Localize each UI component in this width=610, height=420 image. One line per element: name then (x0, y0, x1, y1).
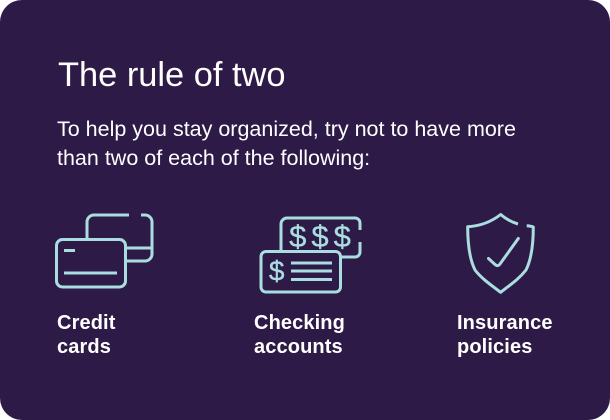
icon: shield with check mark (468, 214, 533, 292)
icon: checks with dollar signs: $ (334, 219, 351, 254)
label: credit cards: cards (57, 336, 111, 358)
icon: checks with dollar signs: $ (311, 219, 329, 254)
label: insurance policies (457, 312, 553, 358)
label: insurance policies: Insurance (457, 312, 553, 334)
label: checking accounts: Checking (254, 312, 345, 334)
icon: checks with dollar signs (261, 218, 360, 292)
intro text: than two of each of the following: (57, 146, 370, 170)
intro text: To help you stay organized, try not to have more (57, 117, 516, 141)
label: credit cards: Credit (57, 312, 116, 334)
title: The rule of two (58, 56, 285, 94)
icon: checks with dollar signs: $ (289, 219, 306, 254)
label: checking accounts (254, 312, 345, 358)
label: credit cards (57, 312, 116, 358)
intro text (57, 117, 516, 170)
label: checking accounts: accounts (254, 336, 343, 358)
label: insurance policies: policies (457, 336, 532, 358)
icon: checks with dollar signs: $ (269, 256, 285, 286)
icon: credit cards (56, 215, 152, 287)
